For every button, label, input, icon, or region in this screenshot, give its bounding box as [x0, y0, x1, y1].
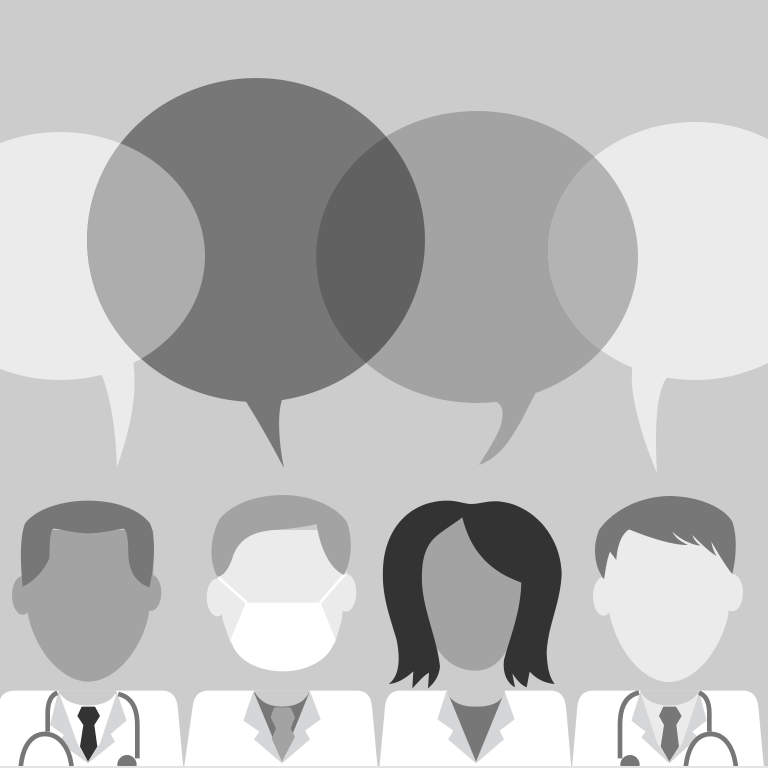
top	[448, 693, 504, 762]
speech bubble: far right	[548, 122, 768, 473]
shirt	[254, 693, 309, 760]
mask	[231, 603, 335, 671]
coat	[379, 691, 571, 768]
hair	[21, 501, 154, 587]
ears	[12, 576, 33, 615]
mask straps	[218, 574, 345, 603]
hair	[595, 496, 736, 579]
bubble overlap: left and dark	[87, 144, 205, 358]
doctor 4: stethoscope man	[572, 496, 764, 768]
ears	[207, 578, 228, 616]
neck	[447, 660, 505, 707]
neck	[58, 691, 117, 706]
ears	[593, 577, 614, 616]
tie	[271, 707, 295, 762]
stethoscope	[620, 693, 736, 768]
coat	[184, 691, 378, 768]
doctor 1: stethoscope man	[0, 501, 183, 768]
coat	[0, 691, 183, 768]
neck	[640, 691, 699, 706]
face	[23, 530, 153, 682]
tie	[77, 707, 100, 762]
doctor 1 and doctor 2	[0, 495, 378, 768]
shirt	[59, 693, 117, 762]
lapels	[631, 691, 707, 763]
stethoscope	[21, 693, 137, 768]
face	[421, 516, 522, 671]
doctor 2: masked man	[184, 495, 378, 768]
doctor 3: woman	[379, 501, 571, 768]
lapels	[243, 691, 321, 763]
speech bubble: dark centre left	[87, 78, 425, 468]
lapels	[50, 691, 127, 763]
bottom edge line	[0, 766, 768, 768]
hair	[383, 501, 562, 688]
coat	[572, 691, 764, 768]
hair	[211, 495, 351, 577]
lapels	[437, 691, 515, 763]
bubble overlap: dark and medium	[316, 136, 425, 363]
neck	[254, 691, 310, 707]
tie	[659, 707, 682, 762]
speech bubble: medium centre right	[316, 111, 638, 465]
shirt	[641, 693, 699, 762]
speech bubble: far left	[0, 132, 205, 467]
face	[604, 530, 732, 682]
bubble overlap: medium and right	[548, 157, 638, 350]
face	[218, 530, 347, 643]
doctor 3 and doctor 4	[379, 496, 764, 768]
